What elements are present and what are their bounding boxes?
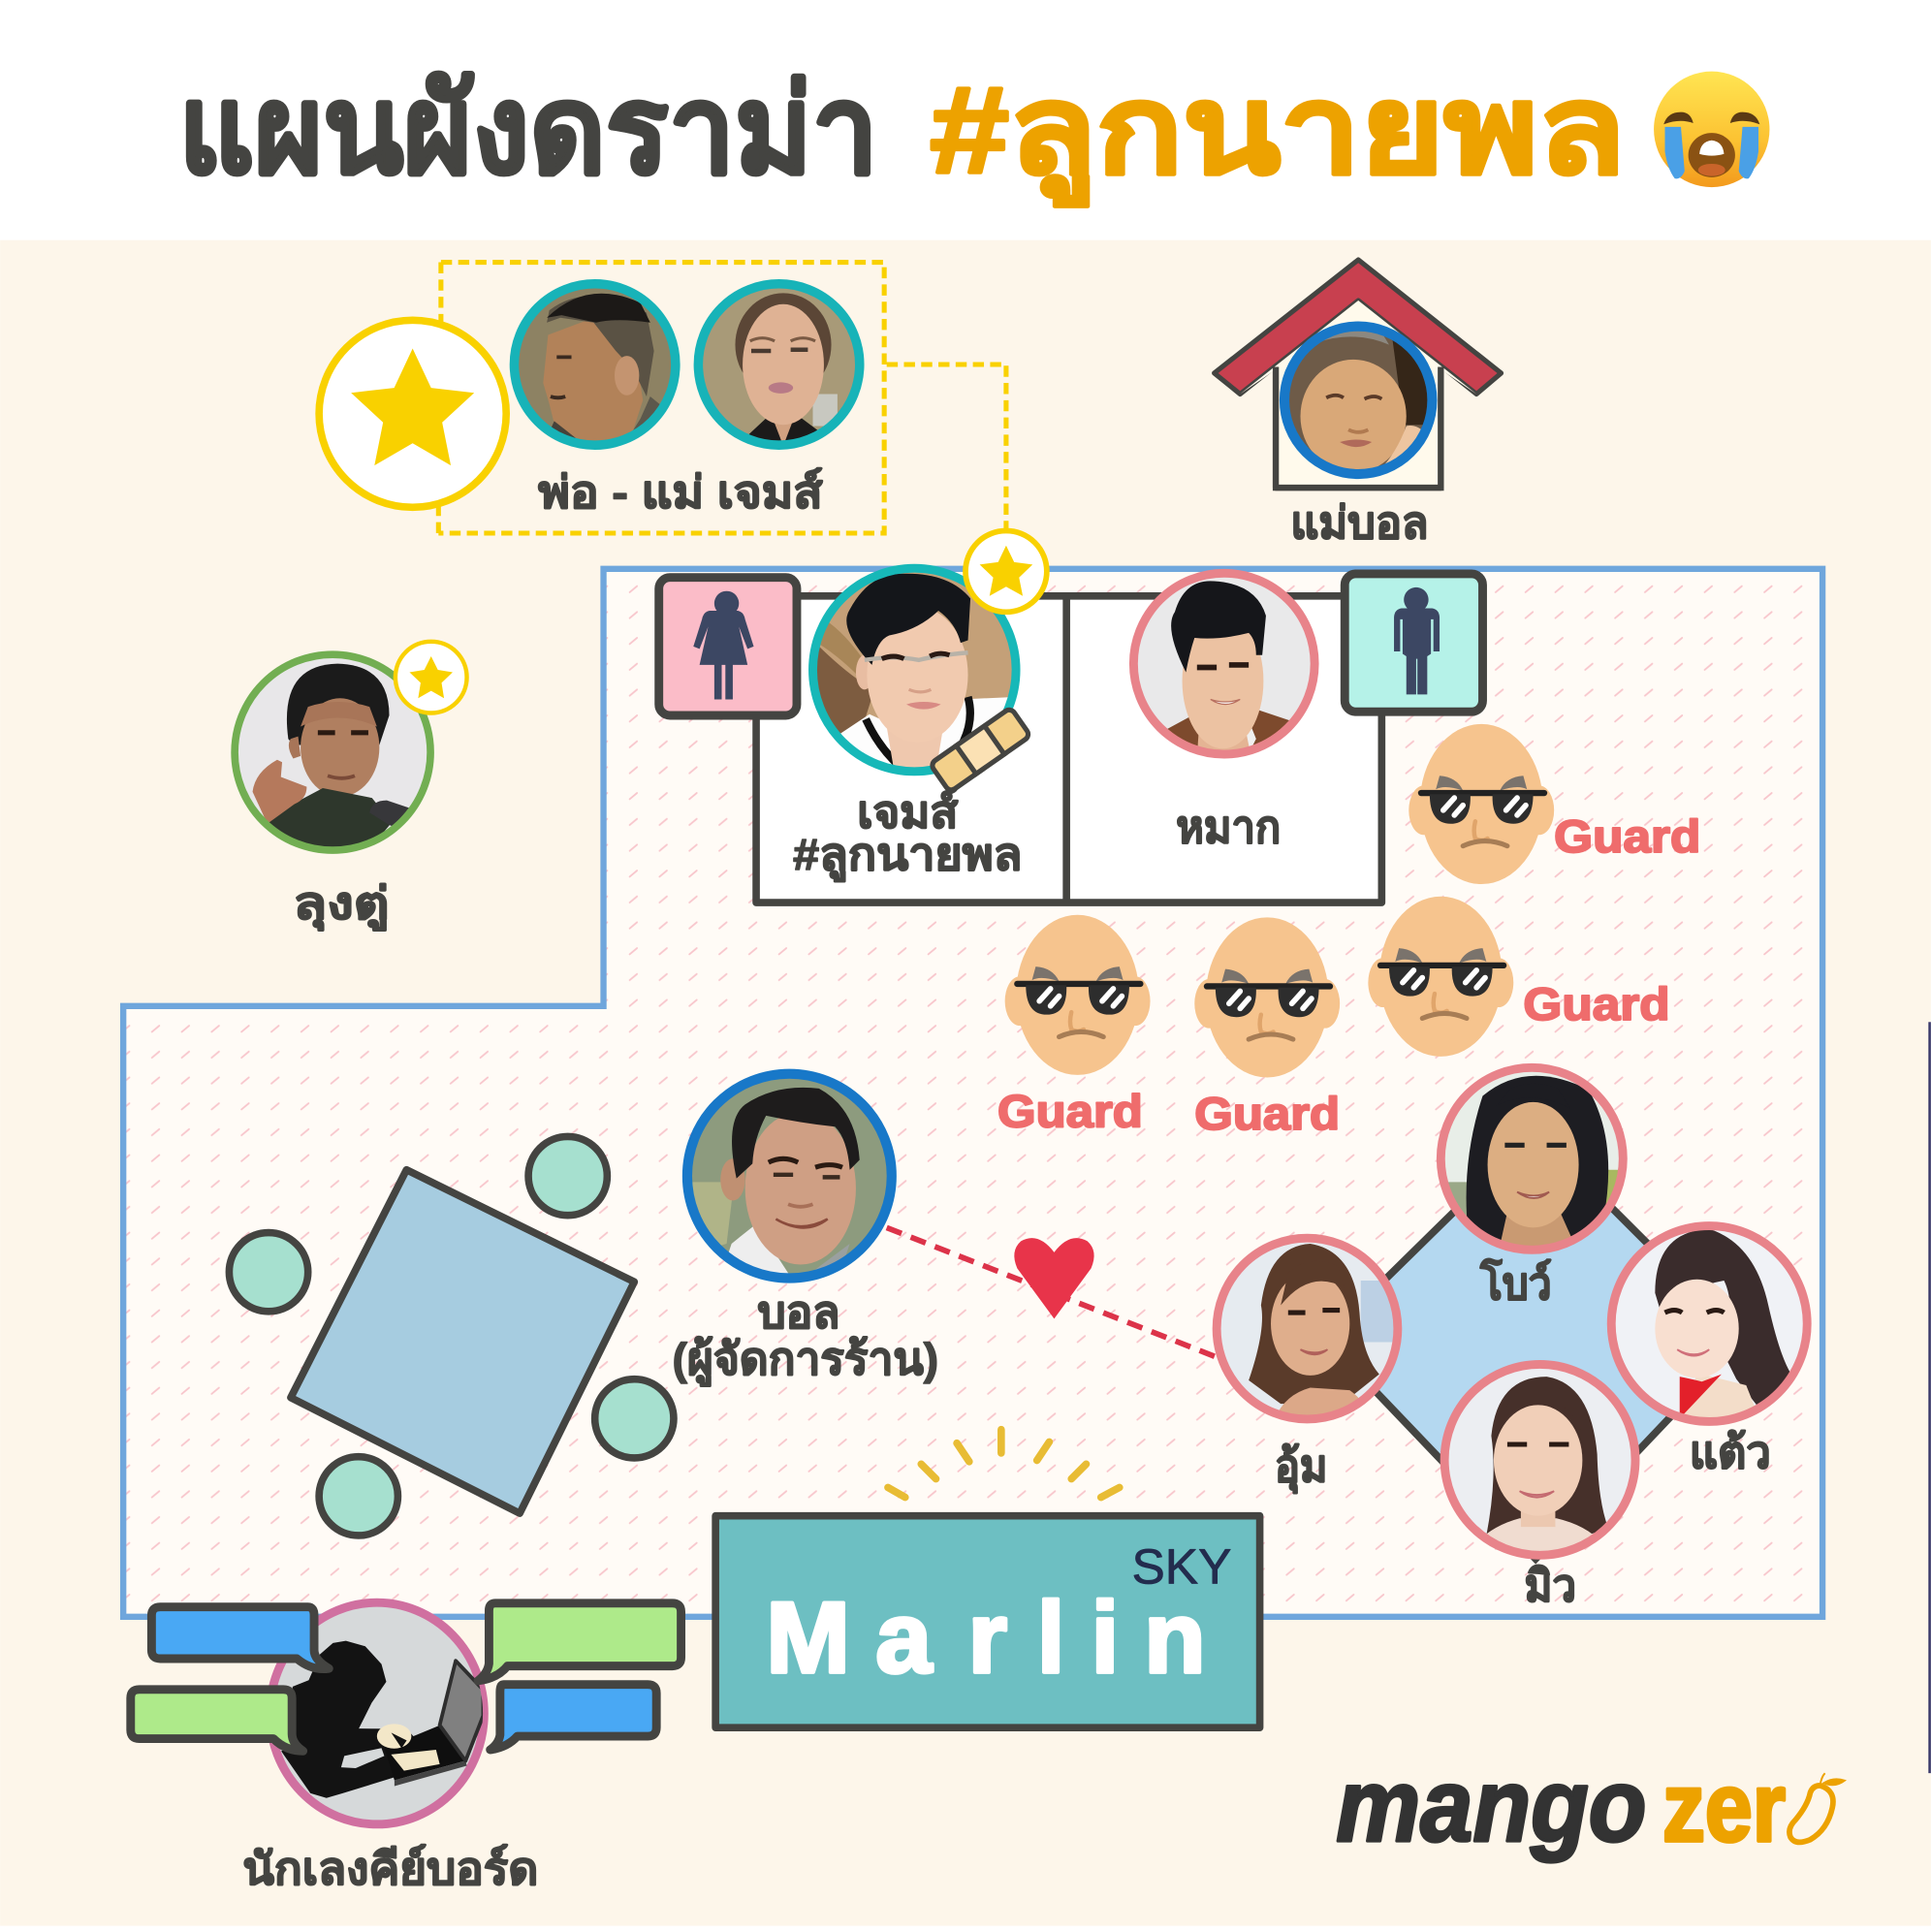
icon: star badge	[966, 530, 1047, 612]
label: Mew: มิว	[1525, 1561, 1576, 1610]
group: uncle Tu	[234, 642, 467, 932]
guard: top right: Guard	[1554, 810, 1700, 862]
hacker silhouette	[281, 1641, 483, 1798]
icon: gents sign	[1345, 574, 1482, 712]
guard: left: Guard	[997, 1085, 1143, 1136]
house roof	[1215, 260, 1502, 394]
group: keyboard warrior	[131, 1602, 681, 1893]
mango icon	[1789, 1773, 1845, 1842]
icon: large star badge	[319, 320, 506, 507]
photo: Taew	[1608, 1222, 1810, 1425]
icon: crying emoji	[1654, 72, 1769, 187]
group: James parents	[319, 263, 1006, 533]
photo: mother	[695, 281, 862, 451]
label: Bow: โบว์	[1479, 1257, 1552, 1309]
icon: star badge	[396, 642, 467, 713]
icon: bandage	[930, 708, 1030, 792]
label: James	[793, 788, 1022, 882]
guard: right	[1368, 897, 1670, 1057]
group: table and stools	[229, 1136, 674, 1536]
chat bubble: blue left	[151, 1607, 329, 1669]
label: keyboard warrior: นักเลงคีย์บอร์ด	[242, 1844, 538, 1893]
label: Mark: หมาก	[1176, 803, 1281, 852]
icon: ladies sign	[659, 578, 797, 715]
label: Taew: แต้ว	[1690, 1428, 1771, 1477]
dashed relation line	[887, 1227, 1219, 1358]
house body	[1276, 364, 1440, 488]
guard: middle	[1194, 917, 1340, 1139]
label: Ball manager: (ผู้จัดการร้าน)	[673, 1335, 938, 1387]
label: Ball manager	[673, 1287, 938, 1387]
chat bubble: green right	[478, 1603, 681, 1681]
photo: Bow	[1438, 1063, 1627, 1253]
photo circle	[269, 1602, 484, 1824]
table diamond	[1325, 1131, 1744, 1559]
photo: Mew	[1442, 1363, 1639, 1560]
sign board	[715, 1516, 1260, 1727]
photo: James	[812, 566, 1016, 772]
label: James: เจมส์	[857, 788, 958, 838]
icon: heart	[1014, 1238, 1094, 1318]
logo: mango zero	[1336, 1747, 1845, 1863]
title: แผนผังดราม่า	[178, 61, 878, 199]
stage sign: Sky Marlin	[715, 1430, 1260, 1727]
chat bubble: blue right	[491, 1685, 656, 1750]
panel: venue floor area	[123, 569, 1822, 1617]
group: Ball's mother house	[1215, 260, 1502, 548]
light rays	[888, 1430, 1120, 1498]
photo: Aum	[1215, 1235, 1402, 1422]
stools	[229, 1136, 674, 1536]
guard: middle: Guard	[1194, 1088, 1340, 1139]
restroom walls	[756, 596, 1381, 903]
label: James: #ลูกนายพล	[793, 830, 1022, 882]
photo: Ball	[684, 1072, 892, 1281]
group: women's table	[1215, 1063, 1810, 1610]
photo: father	[511, 281, 679, 448]
title: #ลูกนายพล	[930, 61, 1626, 207]
title	[178, 61, 1626, 207]
dashed connector box	[438, 263, 1006, 533]
group: Ball	[673, 1072, 938, 1387]
label: Aum: อุ้ม	[1275, 1441, 1327, 1494]
logo: mango zero: zer	[1662, 1752, 1786, 1862]
chat bubble: green left	[131, 1690, 303, 1751]
guard: top right	[1409, 724, 1700, 884]
panel: restrooms	[659, 530, 1482, 903]
photo: Ball's mother	[1281, 323, 1436, 478]
sign text: Marlin: Marlin	[766, 1582, 1206, 1694]
label: Ball manager: บอล	[757, 1287, 839, 1337]
table	[291, 1170, 634, 1513]
guard: right: Guard	[1523, 978, 1670, 1029]
label: Ball's mother: แม่บอล	[1290, 498, 1429, 548]
label: parents: พ่อ - แม่ เจมส์	[538, 467, 823, 517]
logo: mango zero: mango	[1336, 1747, 1646, 1863]
photo: uncle Tu	[234, 653, 431, 852]
photo: Mark	[1130, 570, 1317, 758]
sign text: SKY: SKY	[1131, 1539, 1231, 1595]
label: uncle Tu: ลุงตู่	[293, 879, 390, 932]
guard: left	[997, 915, 1151, 1136]
